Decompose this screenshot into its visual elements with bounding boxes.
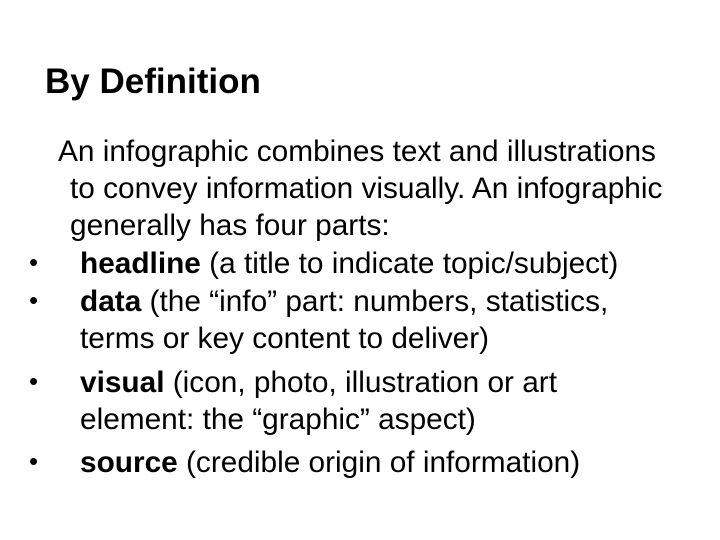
text block: definition: element: the “graphic” aspect) [80,403,476,436]
text block: definition: generally has four parts: [70,209,390,242]
text block: definition: • [29,366,38,396]
text block: definition: visual (icon, photo, illustration or art [80,366,557,399]
text block: definition: data (the “info” part: numbers, statistics, [80,285,608,318]
text block: definition: to convey information visually. An infographic [70,172,662,205]
text block: definition: An infographic combines text and illustrations [58,135,656,168]
text block: definition: terms or key content to deliver) [80,322,489,355]
text block: definition: headline (a title to indicate topic/subject) [80,247,618,280]
title: By Definition [45,62,261,101]
text block: definition: source (credible origin of information) [80,446,580,479]
text block: definition: • [29,247,38,277]
text block: definition: • [29,285,38,315]
text block: definition: • [29,446,38,476]
